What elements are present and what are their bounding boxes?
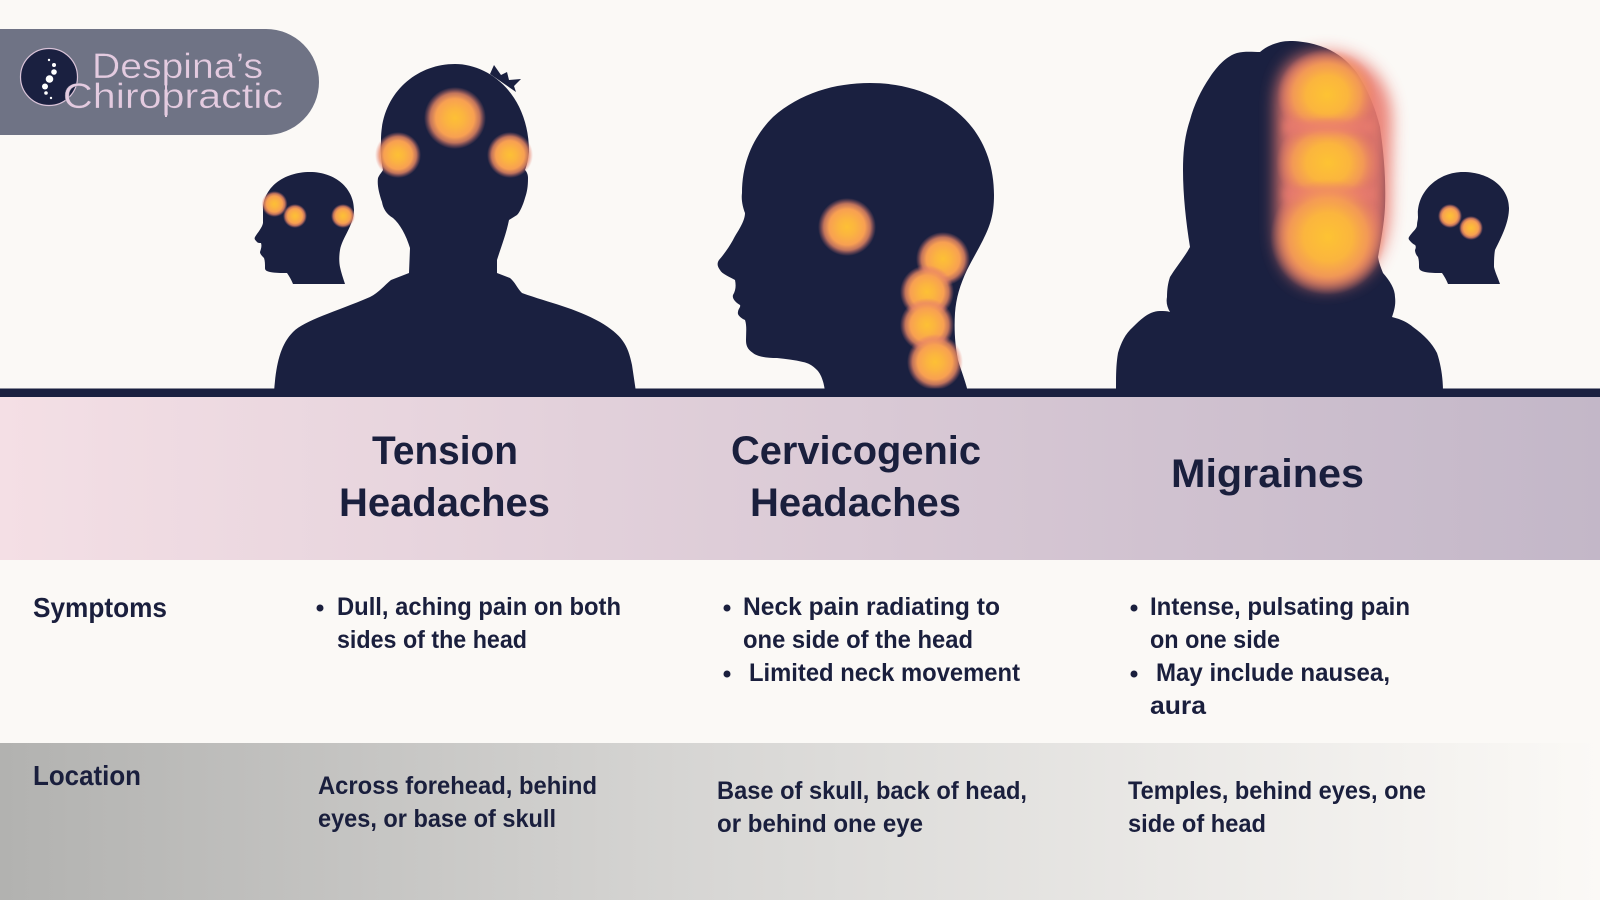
logo badge bbox=[0, 29, 319, 135]
location: cervicogenic: Base of skull, back of head, bbox=[717, 777, 1027, 805]
header band bbox=[0, 397, 1600, 560]
pain points bbox=[375, 87, 533, 178]
heading: tension headaches bbox=[339, 429, 550, 525]
symptoms: tension: Dull, aching pain on both bbox=[337, 593, 621, 621]
symptoms: migraines: aura bbox=[1150, 692, 1207, 720]
location: migraines: Temples, behind eyes, one bbox=[1128, 777, 1426, 805]
symptoms: cervicogenic: one side of the head bbox=[743, 626, 973, 654]
symptoms: migraines: on one side bbox=[1150, 626, 1280, 654]
pain glow column bbox=[1270, 49, 1392, 295]
location: cervicogenic bbox=[717, 777, 1027, 838]
hair spikes bbox=[490, 65, 521, 92]
location: migraines: side of head bbox=[1128, 810, 1266, 838]
cervicogenic headache silhouette bbox=[718, 83, 994, 392]
symptoms: cervicogenic bbox=[724, 593, 1021, 687]
small head: tension pain points bbox=[255, 172, 355, 284]
baseline bar bbox=[0, 388, 1600, 397]
location: cervicogenic: or behind one eye bbox=[717, 810, 923, 838]
migraine silhouette bbox=[1116, 41, 1443, 392]
row label: symptoms: Symptoms bbox=[33, 592, 167, 623]
location: tension bbox=[318, 772, 597, 833]
symptoms: tension bbox=[316, 593, 621, 654]
heading: cervicogenic headaches: Headaches bbox=[750, 481, 961, 525]
tension headache silhouette bbox=[274, 64, 636, 392]
symptoms row bbox=[33, 592, 1410, 720]
logo wordmark: Chiropractic bbox=[63, 77, 283, 116]
location: tension: Across forehead, behind bbox=[318, 772, 597, 800]
heading: cervicogenic headaches: Cervicogenic bbox=[731, 429, 981, 473]
small head: migraine pain points bbox=[1409, 172, 1509, 284]
symptoms: migraines: May include nausea, bbox=[1156, 659, 1390, 687]
heading: tension headaches: Tension bbox=[372, 429, 518, 473]
symptoms: tension: sides of the head bbox=[337, 626, 527, 654]
location: migraines bbox=[1128, 777, 1426, 838]
logo wordmark bbox=[63, 47, 283, 117]
heading: migraines: Migraines bbox=[1171, 452, 1364, 496]
symptoms: migraines: Intense, pulsating pain bbox=[1150, 593, 1410, 621]
location row bbox=[0, 743, 1600, 900]
symptoms: migraines bbox=[1130, 593, 1410, 720]
logo wordmark: Despina’s bbox=[92, 47, 263, 86]
location: tension: eyes, or base of skull bbox=[318, 805, 556, 833]
heading: tension headaches: Headaches bbox=[339, 481, 550, 525]
heading: cervicogenic headaches bbox=[731, 429, 981, 525]
row label: location: Location bbox=[33, 760, 141, 791]
symptoms: cervicogenic: Limited neck movement bbox=[749, 659, 1021, 687]
pain points bbox=[818, 198, 970, 390]
symptoms: cervicogenic: Neck pain radiating to bbox=[743, 593, 1000, 621]
logo emblem: spine in circle bbox=[20, 48, 78, 106]
